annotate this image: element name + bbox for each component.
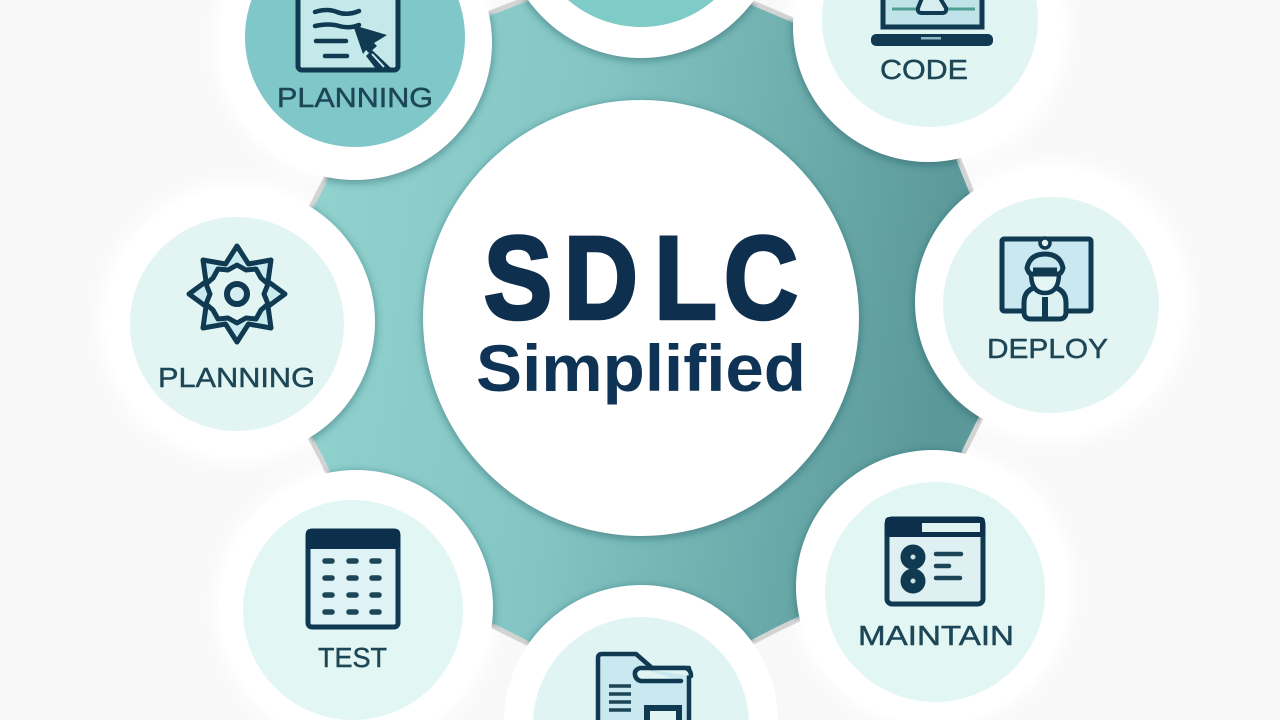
node: top (cropped) [502, 0, 780, 58]
label: CODE [880, 54, 968, 85]
octagonal teal ring [298, 0, 985, 700]
shadows cast on ring [310, 0, 981, 644]
node: planning left [105, 187, 375, 457]
label: PLANNING [277, 82, 433, 113]
icon: folder document [598, 654, 691, 720]
label: TEST [318, 642, 387, 673]
icon: document with cursor [298, 0, 398, 70]
label: PLANNING [158, 362, 315, 393]
label: DEPLOY [987, 333, 1108, 364]
subtitle: Simplified [476, 331, 806, 405]
node: test [219, 470, 493, 720]
title: SDLC [484, 213, 798, 344]
icon: app window [885, 517, 985, 604]
icon: calendar table [306, 529, 400, 627]
label: MAINTAIN [858, 620, 1014, 651]
icon: gear flower [189, 246, 285, 342]
centre hub [423, 100, 859, 536]
node: planning top-left [218, 0, 492, 180]
node: maintain [796, 450, 1070, 720]
node: bottom (cropped) [504, 585, 778, 720]
icon: laptop [871, 0, 993, 46]
icon: person on screen [1002, 238, 1091, 319]
node: code [793, 0, 1063, 162]
node: deploy [915, 167, 1185, 437]
